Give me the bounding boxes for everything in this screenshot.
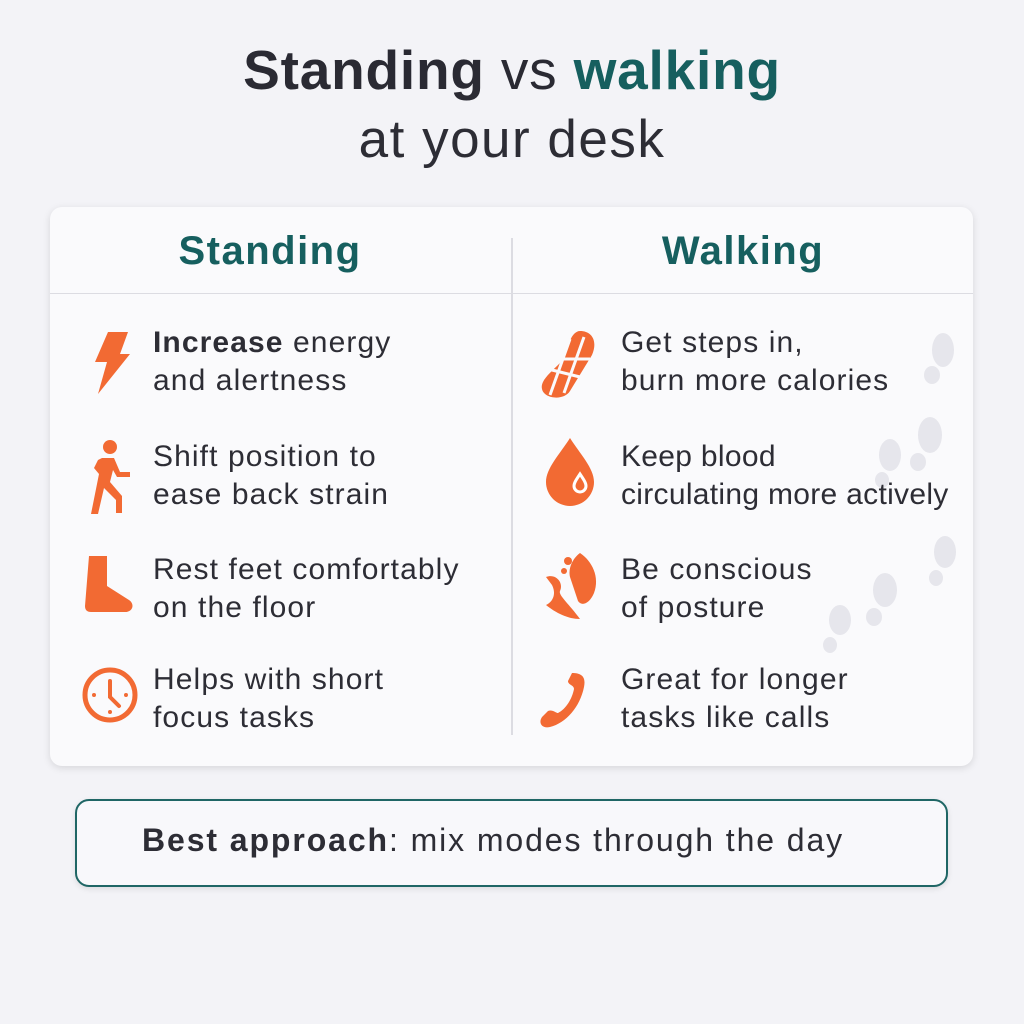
item: rest feet <box>85 553 460 624</box>
item: focus: focus tasks <box>153 701 315 734</box>
item: posture: Be conscious <box>621 553 813 586</box>
item: posture: of posture <box>621 591 765 624</box>
icon: walking person <box>91 440 130 514</box>
callout: best approach: Best approach: mix modes through the day <box>142 822 844 858</box>
item: shift position <box>91 440 389 514</box>
title: Standing vs walking <box>243 39 781 101</box>
item: steps: burn more calories <box>621 364 889 397</box>
icon: foot <box>85 556 132 612</box>
title: at your desk <box>359 110 665 169</box>
item: calls <box>540 663 849 734</box>
item: calls: tasks like calls <box>621 701 830 734</box>
icon: clock <box>82 668 138 722</box>
icon: phone <box>540 673 584 728</box>
item: blood <box>546 438 949 511</box>
item: steps <box>542 326 889 398</box>
callout: best approach <box>75 799 948 887</box>
icon: shoe sole <box>542 331 594 398</box>
item: rest feet: Rest feet comfortably <box>153 553 460 586</box>
item: focus: Helps with short <box>153 663 384 696</box>
item: shift position: ease back strain <box>153 478 389 511</box>
item: posture <box>546 553 813 624</box>
item: steps: Get steps in, <box>621 326 804 359</box>
icon: posture <box>546 553 596 619</box>
item: calls: Great for longer <box>621 663 849 696</box>
item: energy: Increase energy <box>153 326 391 359</box>
icon: drop <box>546 438 594 506</box>
title <box>243 39 781 169</box>
item: blood: Keep blood <box>621 440 776 473</box>
panel: comparison card <box>50 207 973 766</box>
item: energy <box>95 326 391 397</box>
icon: lightning <box>95 332 130 394</box>
item: shift position: Shift position to <box>153 440 377 473</box>
decorative footprints <box>823 333 956 653</box>
heading: Standing: Standing <box>178 229 362 273</box>
item: energy: and alertness <box>153 364 347 397</box>
item: blood: circulating more actively <box>621 478 949 511</box>
heading: Walking: Walking <box>662 229 824 273</box>
item: rest feet: on the floor <box>153 591 316 624</box>
item: focus <box>82 663 384 734</box>
